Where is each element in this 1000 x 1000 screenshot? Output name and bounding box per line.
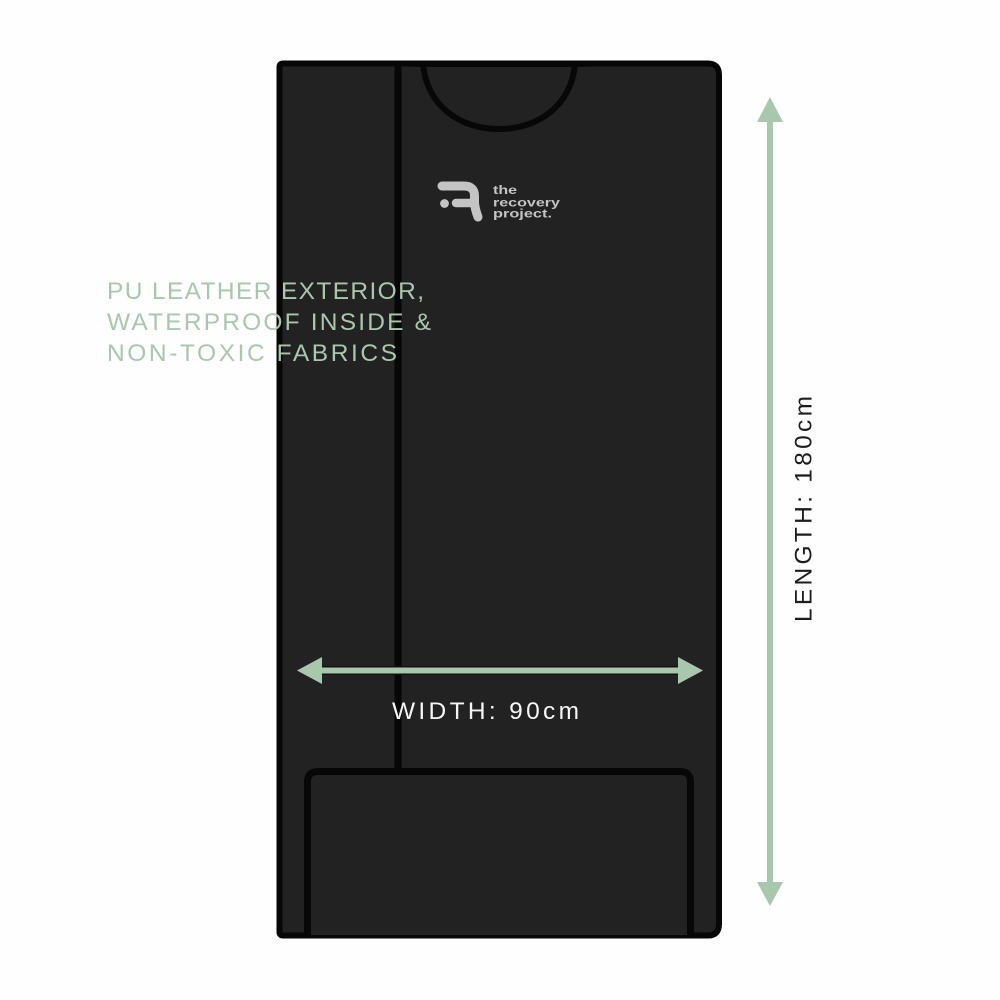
text block: materials note: WATERPROOF INSIDE & bbox=[107, 309, 431, 336]
logo wordmark: project. bbox=[493, 208, 552, 220]
label: length: LENGTH: 180cm bbox=[790, 396, 818, 622]
arrow: width bbox=[297, 657, 703, 684]
text block: materials note: NON-TOXIC FABRICS bbox=[107, 340, 397, 367]
logo wordmark: the bbox=[493, 185, 517, 197]
icon: R mark bbox=[440, 186, 478, 217]
panel: blanket body bbox=[280, 61, 719, 936]
text block: materials note bbox=[107, 278, 431, 367]
logo wordmark bbox=[493, 185, 561, 220]
arrow: length bbox=[757, 97, 783, 906]
label: width: WIDTH: 90cm bbox=[392, 698, 579, 725]
seam: vertical zip bbox=[394, 63, 402, 771]
text block: materials note: PU LEATHER EXTERIOR, bbox=[107, 278, 424, 305]
logo wordmark: recovery bbox=[493, 198, 561, 210]
top edge over neck bbox=[415, 61, 585, 67]
logo: the recovery project bbox=[440, 185, 561, 220]
neck cutout bbox=[423, 64, 575, 129]
pocket: foot flap bbox=[308, 772, 690, 935]
